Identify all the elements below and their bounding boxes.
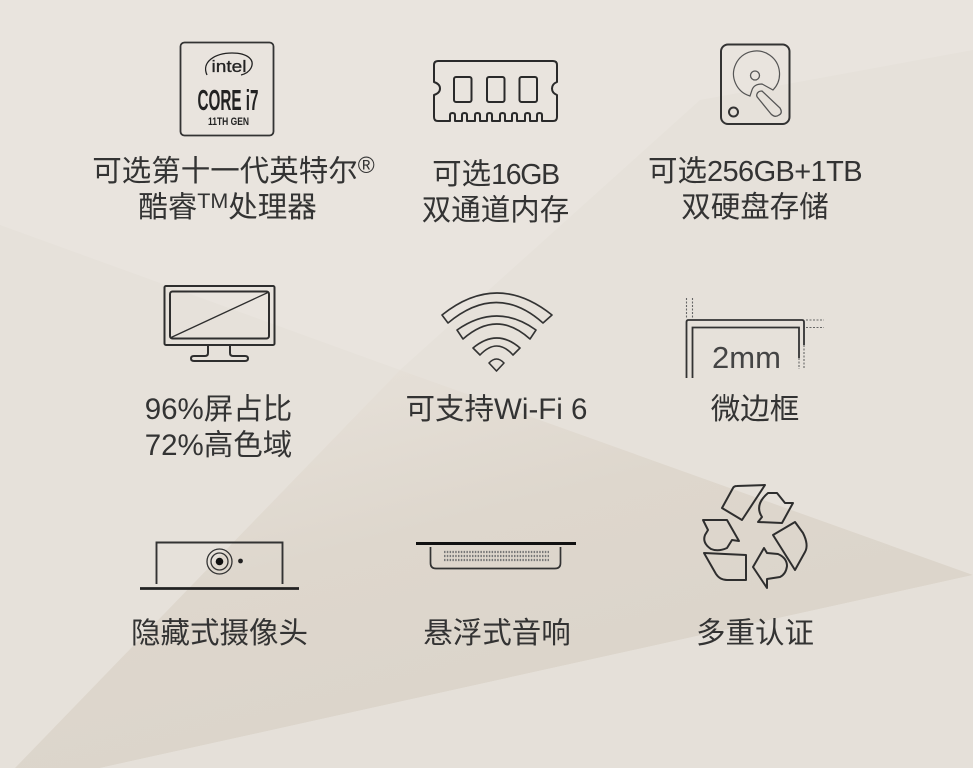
text: processor label: 酷睿TM处理器 [138,189,317,224]
text: memory label: 双通道内存 [422,194,569,227]
text: speaker label: 悬浮式音响 [423,617,571,650]
icon: Intel Core i7 badge: 11TH GEN [208,116,249,128]
icon: Intel Core i7 badge: intel [212,57,246,76]
text: certification label: 多重认证 [696,617,814,650]
text: processor label [92,152,375,224]
text: memory label [422,158,569,227]
text: processor label: 可选第十一代英特尔® [92,152,375,188]
text: screen label: 96%屏占比 [145,393,292,426]
icon: Intel Core i7 badge: CORE i7 [198,85,258,117]
text: storage label [648,155,862,224]
icon: narrow bezel: 2mm [712,340,781,375]
text: storage label: 可选256GB+1TB [648,155,862,188]
text: screen label: 72%高色域 [145,429,292,462]
text: bezel label: 微边框 [711,393,799,426]
text: wifi label: 可支持Wi-Fi 6 [406,393,587,426]
text: screen label [145,393,292,462]
text: storage label: 双硬盘存储 [681,191,829,224]
text: camera label: 隐藏式摄像头 [131,617,308,650]
text: memory label: 可选16GB [432,158,559,191]
